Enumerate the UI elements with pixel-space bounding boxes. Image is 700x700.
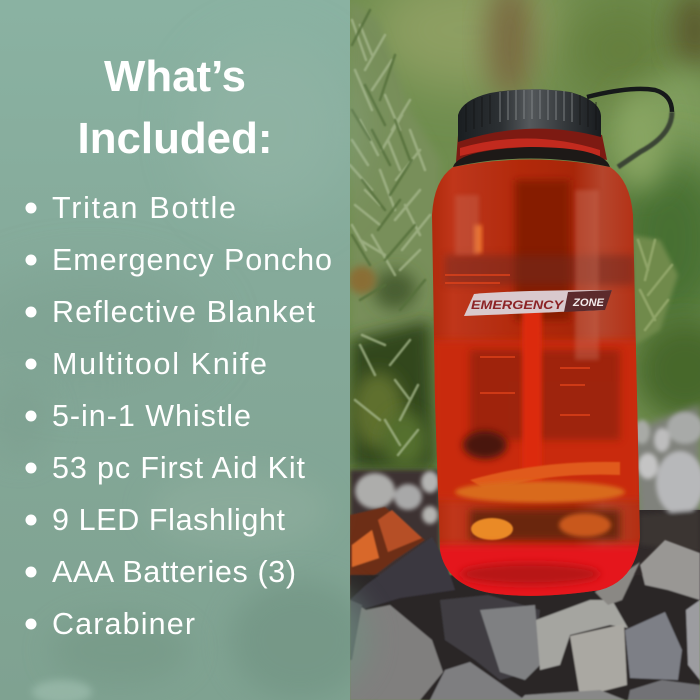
bottle label: EMERGENCY	[471, 298, 564, 312]
rocks foreground	[350, 537, 700, 700]
bottle	[428, 89, 648, 605]
bottle label	[464, 290, 612, 316]
item: Reflective Blanket: Reflective Blanket	[52, 295, 316, 329]
orange rock	[350, 507, 425, 585]
photo: bottle on rocks	[348, 0, 700, 700]
item: 9 LED Flashlight: 9 LED Flashlight	[52, 503, 286, 537]
lid	[458, 89, 601, 142]
bottle neck	[456, 126, 607, 162]
strap loop	[587, 89, 672, 167]
pine branch left	[348, 0, 440, 470]
panel: what's included	[0, 0, 370, 700]
heading: Included:	[78, 114, 272, 163]
bottle body	[432, 160, 640, 596]
item: Carabiner: Carabiner	[52, 607, 195, 641]
item: AAA Batteries (3): AAA Batteries (3)	[52, 555, 296, 589]
heading: What’s	[104, 52, 246, 101]
photo background: foliage	[350, 0, 700, 700]
list of kit items	[26, 191, 332, 641]
neck ring	[453, 147, 610, 167]
panel texture	[0, 40, 370, 700]
heading	[78, 52, 272, 163]
item: Emergency Poncho: Emergency Poncho	[52, 243, 332, 277]
bottle label: ZONE	[572, 297, 605, 309]
pine branch right	[632, 235, 678, 345]
item: 5-in-1 Whistle: 5-in-1 Whistle	[52, 399, 251, 433]
item: 53 pc First Aid Kit: 53 pc First Aid Kit	[52, 451, 306, 485]
item: Tritan Bottle: Tritan Bottle	[52, 191, 236, 225]
item: Multitool Knife: Multitool Knife	[52, 347, 267, 381]
distant gravel	[350, 405, 700, 600]
bottle interior colour bands	[515, 180, 570, 320]
